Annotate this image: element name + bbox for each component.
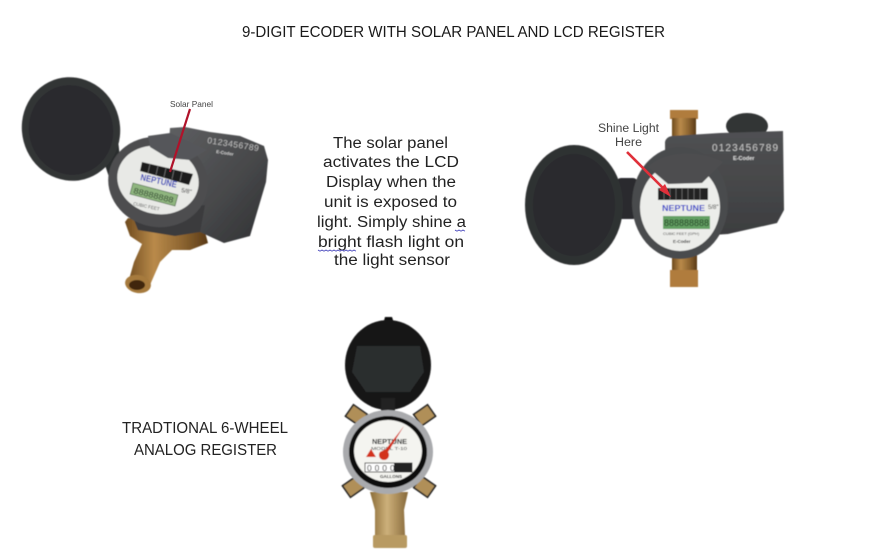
analog register caption: ANALOG REGISTER <box>134 442 277 459</box>
units label: CUBIC FEET (GPH) <box>663 231 700 236</box>
gallons label: GALLONS <box>380 474 402 479</box>
register box <box>665 131 784 238</box>
meter face <box>354 420 422 482</box>
callout: shine light label: Shine Light <box>598 123 660 135</box>
meter ring <box>100 128 216 236</box>
description text block: unit is exposed to <box>324 194 457 211</box>
brass pipe top <box>670 110 698 142</box>
brass pipe body <box>124 218 208 295</box>
solar panel cells <box>658 188 708 200</box>
brass pipe <box>370 492 408 548</box>
lid open cover <box>525 145 623 265</box>
logo triangle <box>366 449 376 457</box>
callout: solar panel label: Solar Panel <box>170 99 213 109</box>
brass pipe bottom <box>670 255 698 287</box>
callout: shine light label: Here <box>615 137 642 149</box>
meter face <box>640 163 720 251</box>
LCD display: 888888888 <box>664 218 709 229</box>
description text block: The solar panel <box>333 135 448 152</box>
size label: 5/8" <box>708 205 718 211</box>
LCD display: 88888888 <box>133 186 175 205</box>
meter photo: traditional analog register <box>342 317 436 548</box>
brand label: NEPTUNE <box>662 204 706 213</box>
meter photo: front E-Coder with shine light callout <box>525 110 784 287</box>
analog register caption: TRADTIONAL 6-WHEEL <box>122 420 288 437</box>
callout: shine light label <box>598 123 660 149</box>
description text block: light. Simply shine a <box>317 214 466 231</box>
odometer digits: 0123456789 <box>712 143 778 154</box>
model label: MODEL T-10 <box>371 446 408 451</box>
size label: 5/8" <box>181 188 192 196</box>
brand label: NEPTUNE <box>140 172 178 190</box>
description text block <box>317 135 466 269</box>
title: 9-DIGIT ECODER WITH SOLAR PANEL AND LCD REGISTER <box>242 24 665 41</box>
units label: CUBIC FEET <box>133 201 160 212</box>
E-Coder box label: E-Coder <box>216 149 234 157</box>
description text block: bright flash light on <box>318 234 464 251</box>
arrow: shine light pointer <box>627 152 671 197</box>
odometer wheels: 000000 <box>367 463 410 473</box>
meter ring <box>632 147 728 259</box>
solar panel cells <box>140 162 193 185</box>
lid open cover <box>345 317 431 412</box>
red sweep hand <box>379 426 404 460</box>
description text block: activates the LCD <box>323 154 459 171</box>
arrow: solar panel pointer <box>170 109 190 172</box>
register box <box>165 127 268 243</box>
meter ring <box>343 410 433 494</box>
knob <box>726 113 768 139</box>
description text block: Display when the <box>326 174 456 191</box>
LCD display <box>130 183 178 206</box>
E-Coder face label: E-Coder <box>673 239 691 244</box>
lid open cover <box>10 66 132 192</box>
analog register caption <box>122 420 288 459</box>
brass lugs <box>342 405 436 497</box>
brand label: NEPTUNE <box>372 439 407 446</box>
E-Coder box label: E-Coder <box>733 156 755 162</box>
solar cover <box>148 133 207 160</box>
solar cover <box>648 154 723 184</box>
meter lower body <box>132 205 205 236</box>
meter face <box>111 138 205 222</box>
lid hinge <box>616 178 638 219</box>
odometer digits: 0123456789 <box>207 135 260 153</box>
meter photo: angled E-Coder with solar panel <box>10 66 268 295</box>
lid hinge <box>100 140 122 180</box>
description text block: the light sensor <box>334 252 450 269</box>
